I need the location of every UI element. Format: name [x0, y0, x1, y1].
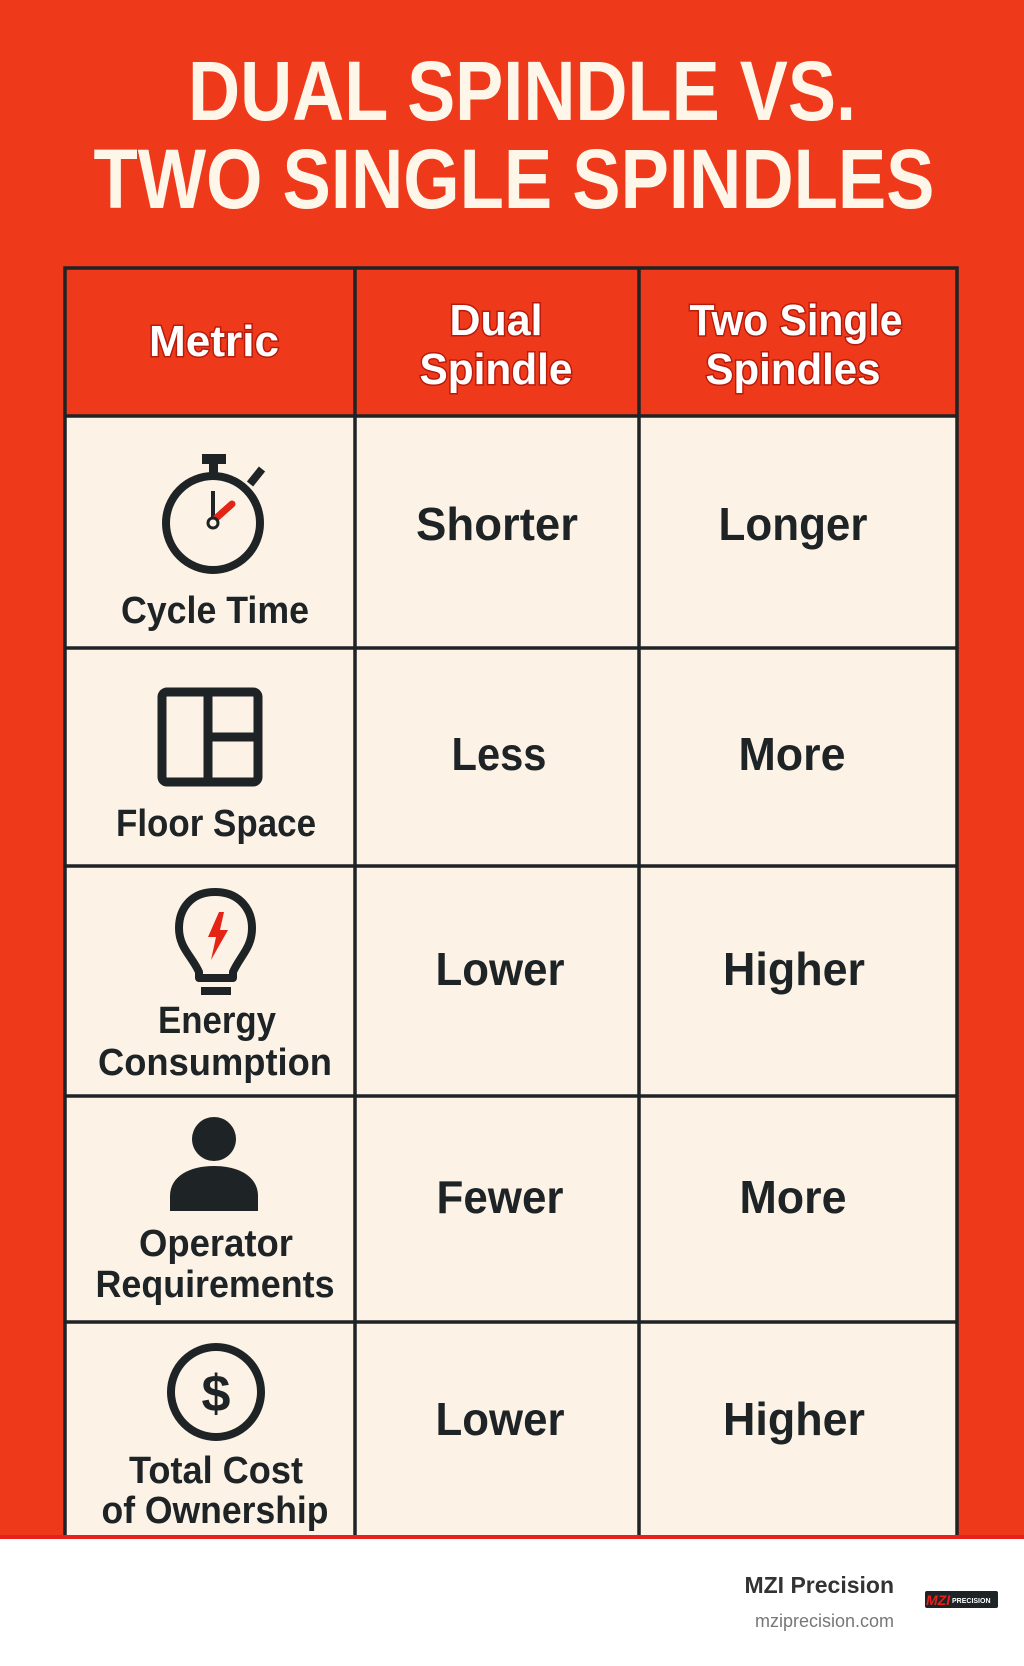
- icon: light bulb: [179, 892, 252, 995]
- row: total cost: of Ownership: [102, 1490, 328, 1532]
- footer: [0, 1535, 1024, 1666]
- comparison table: [65, 268, 957, 1548]
- label: total cost of ownership: Total Cost: [129, 1450, 303, 1492]
- row: total cost: Higher: [723, 1393, 865, 1445]
- row: energy: [98, 892, 865, 1084]
- label: operator requirements: Operator: [139, 1223, 293, 1265]
- logo: [925, 1591, 998, 1608]
- table header row: Spindle: [420, 345, 572, 394]
- table header row: [65, 268, 957, 416]
- row: total cost: [102, 1347, 865, 1532]
- row: total cost: Lower: [436, 1393, 565, 1445]
- icon: dollar coin: $: [202, 1365, 231, 1423]
- label: energy consumption: Energy: [158, 1000, 276, 1042]
- icon: floor plan: [162, 692, 258, 782]
- table header row: Two Single: [690, 296, 902, 345]
- row: energy: Lower: [436, 943, 565, 995]
- icon: stopwatch: [166, 454, 262, 570]
- label: cycle time: Cycle Time: [121, 590, 309, 632]
- logo: MZI: [926, 1592, 951, 1608]
- row: cycle time: [121, 454, 868, 632]
- table header row: Dual: [450, 296, 542, 345]
- row: operator: Requirements: [96, 1264, 334, 1306]
- logo: PRECISION: [952, 1598, 991, 1605]
- label: floor space: Floor Space: [116, 803, 316, 845]
- row: energy: Consumption: [98, 1042, 332, 1084]
- title: [94, 44, 934, 226]
- row: cycle time: Shorter: [416, 498, 578, 550]
- table header row: Spindles: [706, 345, 880, 394]
- icon: person: [170, 1117, 258, 1211]
- footer brand text: MZI Precision: [744, 1572, 894, 1598]
- row: floor space: Less: [452, 728, 546, 780]
- icon: dollar coin: [171, 1347, 261, 1437]
- row: floor space: More: [738, 728, 846, 780]
- row: cycle time: Longer: [718, 498, 868, 550]
- title: DUAL SPINDLE VS.: [188, 44, 856, 138]
- row: floor space: [116, 692, 846, 845]
- footer brand text: [744, 1572, 894, 1631]
- footer brand text: mziprecision.com: [755, 1611, 894, 1631]
- row: operator: Fewer: [436, 1171, 564, 1223]
- table header row: Metric: [149, 317, 279, 366]
- row: operator: [96, 1117, 846, 1306]
- row: operator: More: [740, 1171, 846, 1223]
- row: energy: Higher: [723, 943, 865, 995]
